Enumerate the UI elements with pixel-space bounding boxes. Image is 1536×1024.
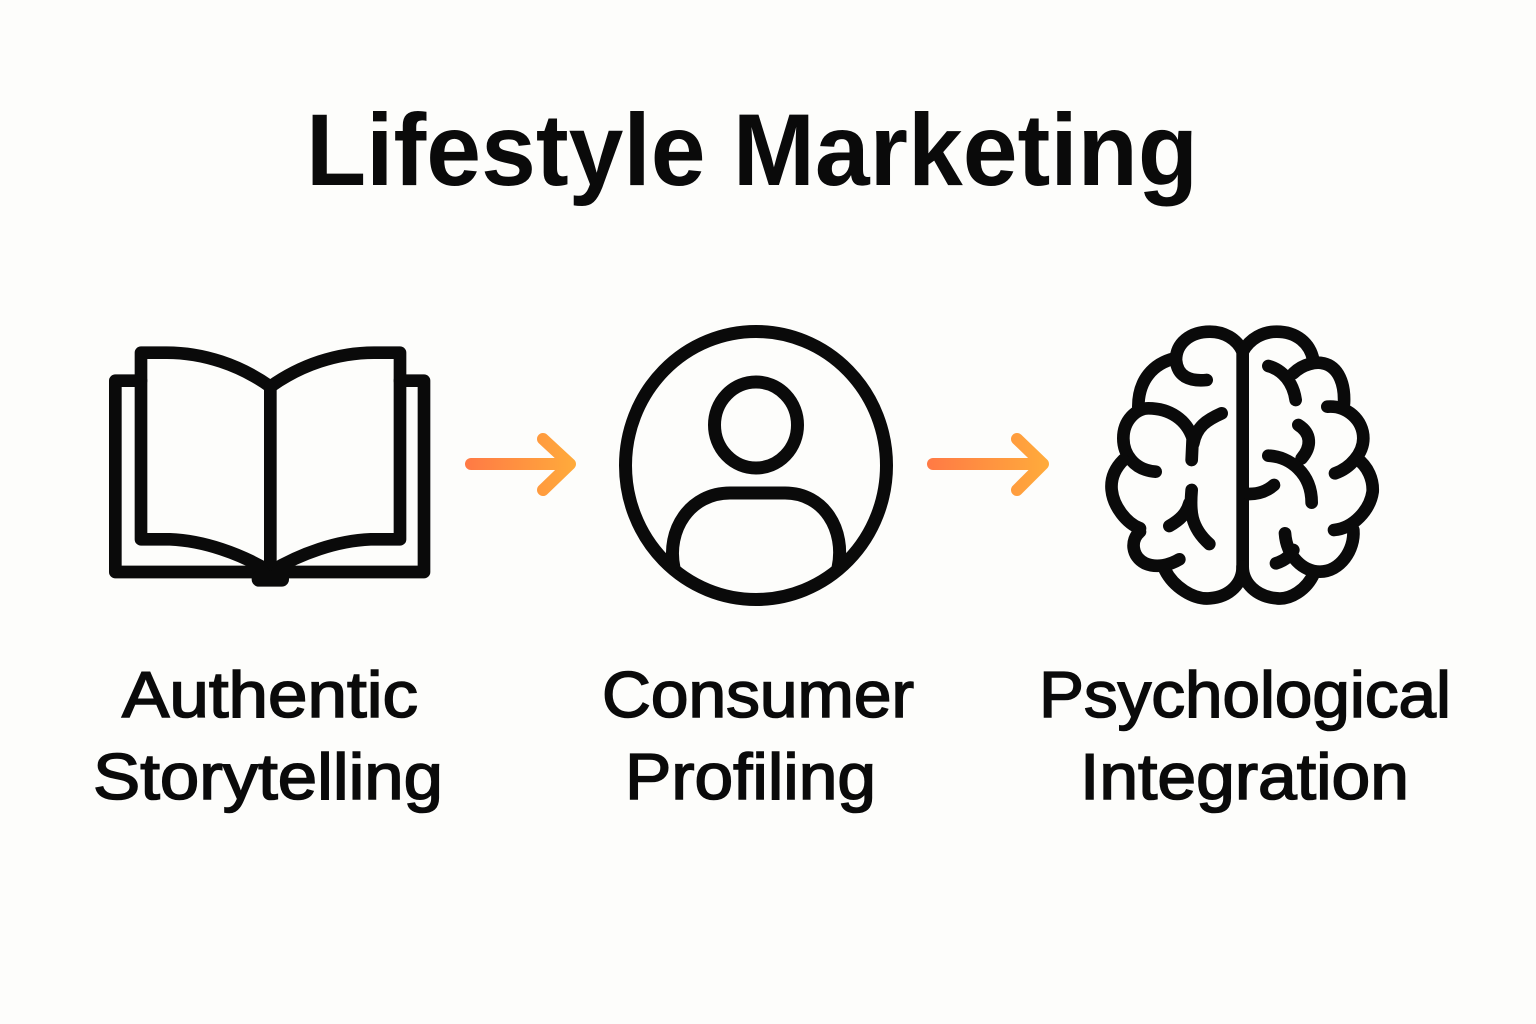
label: Consumer Profiling: Profiling <box>625 740 876 813</box>
arrow: profiling to integration <box>933 439 1043 490</box>
icon: brain <box>1111 332 1373 599</box>
label: Consumer Profiling: Consumer <box>602 658 914 731</box>
arrow: storytelling to profiling <box>471 439 570 490</box>
label: Consumer Profiling <box>602 658 914 813</box>
icon: open book <box>115 353 424 587</box>
label: Psychological Integration: Integration <box>1080 740 1409 813</box>
label: Psychological Integration: Psychological <box>1039 658 1451 731</box>
title: Lifestyle Marketing <box>306 93 1198 207</box>
label: Authentic Storytelling: Authentic <box>122 658 418 731</box>
icon: person in circle <box>626 332 886 600</box>
label: Psychological Integration <box>1039 658 1451 813</box>
label: Authentic Storytelling: Storytelling <box>93 740 443 813</box>
label: Authentic Storytelling <box>93 658 443 813</box>
